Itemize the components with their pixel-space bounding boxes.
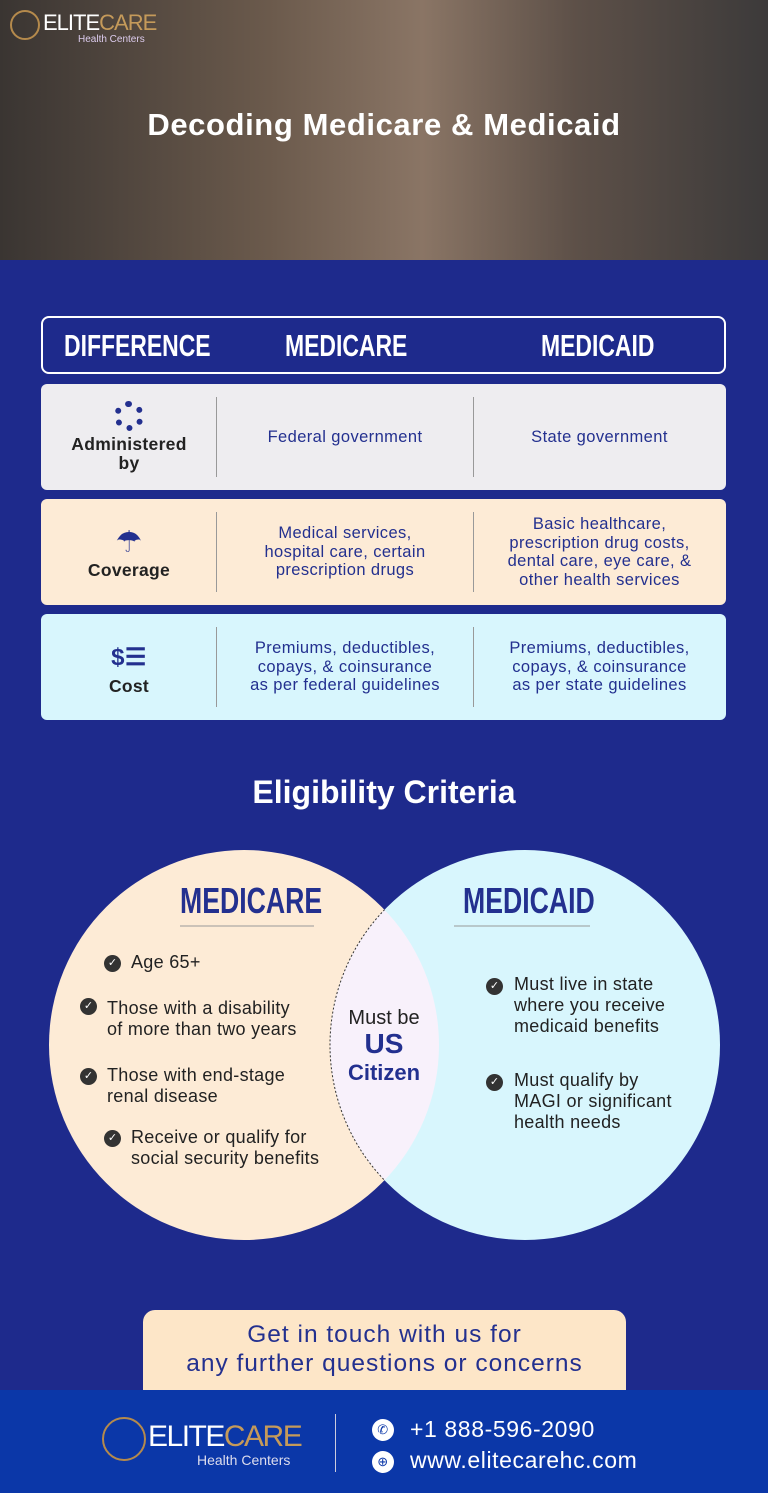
call to action — [143, 1310, 626, 1392]
row: cost: as per state guidelines — [512, 676, 687, 694]
medicare list: ✓ — [108, 957, 117, 969]
row: cost: Premiums, deductibles, — [255, 639, 435, 657]
table header: MEDICAID — [541, 328, 654, 363]
medicare list: renal disease — [107, 1086, 218, 1106]
medicare list: ✓ — [108, 1132, 117, 1144]
call to action: Get in touch with us for — [247, 1321, 522, 1348]
row: administered by: Federal government — [268, 428, 422, 446]
medicare list: Those with end-stage — [107, 1065, 285, 1085]
row: coverage: dental care, eye care, & — [508, 552, 691, 570]
row: cost — [41, 614, 726, 720]
header photo — [0, 0, 768, 260]
row: coverage: prescription drugs — [276, 561, 414, 579]
row: cost: Premiums, deductibles, — [509, 639, 690, 657]
footer — [0, 1390, 768, 1493]
medicare list: Age 65+ — [131, 952, 201, 972]
medicare label: MEDICARE — [180, 880, 322, 921]
row: administered by: by — [118, 453, 140, 473]
medicaid list: medicaid benefits — [514, 1016, 659, 1036]
medicaid list: MAGI or significant — [514, 1091, 672, 1111]
medicaid list: Must qualify by — [514, 1070, 639, 1090]
row: coverage: Basic healthcare, — [533, 515, 666, 533]
medicaid list: ✓ — [490, 980, 499, 992]
footer logo — [102, 1417, 302, 1468]
medicare list: social security benefits — [131, 1148, 319, 1168]
row: administered by: Administered — [71, 434, 187, 454]
row: coverage: other health services — [519, 570, 680, 588]
table header: MEDICARE — [285, 328, 407, 363]
medicare list: ✓ — [84, 1070, 93, 1082]
intersection text: US — [365, 1028, 403, 1059]
table header — [41, 316, 726, 374]
eligibility heading: Eligibility Criteria — [252, 774, 516, 810]
logo: Health Centers — [78, 34, 145, 45]
row: coverage: hospital care, certain — [264, 543, 426, 561]
title: Decoding Medicare & Medicaid — [147, 107, 621, 142]
intersection text — [348, 1007, 420, 1085]
contact info: +1 888-596-2090 — [410, 1416, 595, 1442]
medicare list: Receive or qualify for — [131, 1127, 307, 1147]
logo — [10, 10, 156, 45]
medicaid list: ✓ — [490, 1076, 499, 1088]
row: cost: as per federal guidelines — [250, 676, 440, 694]
contact info: ⊕ — [377, 1454, 389, 1469]
medicare list: Those with a disability — [107, 998, 290, 1018]
row: coverage: prescription drug costs, — [509, 534, 690, 552]
row: cost: Cost — [109, 676, 149, 696]
intersection text: Citizen — [348, 1060, 420, 1085]
call to action: any further questions or concerns — [186, 1350, 583, 1377]
row: coverage: ☂ — [115, 526, 143, 559]
medicaid list: where you receive — [514, 995, 665, 1015]
medicaid list — [486, 974, 672, 1132]
logo: ELITECARE — [43, 10, 156, 35]
medicaid list: health needs — [514, 1112, 621, 1132]
row: administered by — [41, 384, 726, 490]
row: coverage — [41, 499, 726, 605]
medicare list: of more than two years — [107, 1019, 297, 1039]
intersection text: Must be — [348, 1007, 420, 1029]
row: cost: copays, & coinsurance — [258, 658, 432, 676]
footer logo: ELITECARE — [148, 1420, 301, 1453]
venn diagram — [49, 850, 720, 1240]
row: coverage: Medical services, — [278, 524, 412, 542]
medicaid list: Must live in state — [514, 974, 653, 994]
medicaid label: MEDICAID — [463, 880, 595, 921]
footer logo: Health Centers — [197, 1452, 290, 1468]
row: administered by: State government — [531, 428, 668, 446]
contact info: www.elitecarehc.com — [410, 1447, 637, 1473]
contact info: ✆ — [377, 1422, 389, 1437]
contact info — [372, 1416, 637, 1473]
row: coverage: Coverage — [88, 560, 170, 580]
table header: DIFFERENCE — [64, 328, 211, 363]
medicare list — [80, 952, 319, 1168]
row: cost: copays, & coinsurance — [512, 658, 687, 676]
row: cost: $☰ — [111, 644, 147, 671]
medicare list: ✓ — [84, 1000, 93, 1012]
